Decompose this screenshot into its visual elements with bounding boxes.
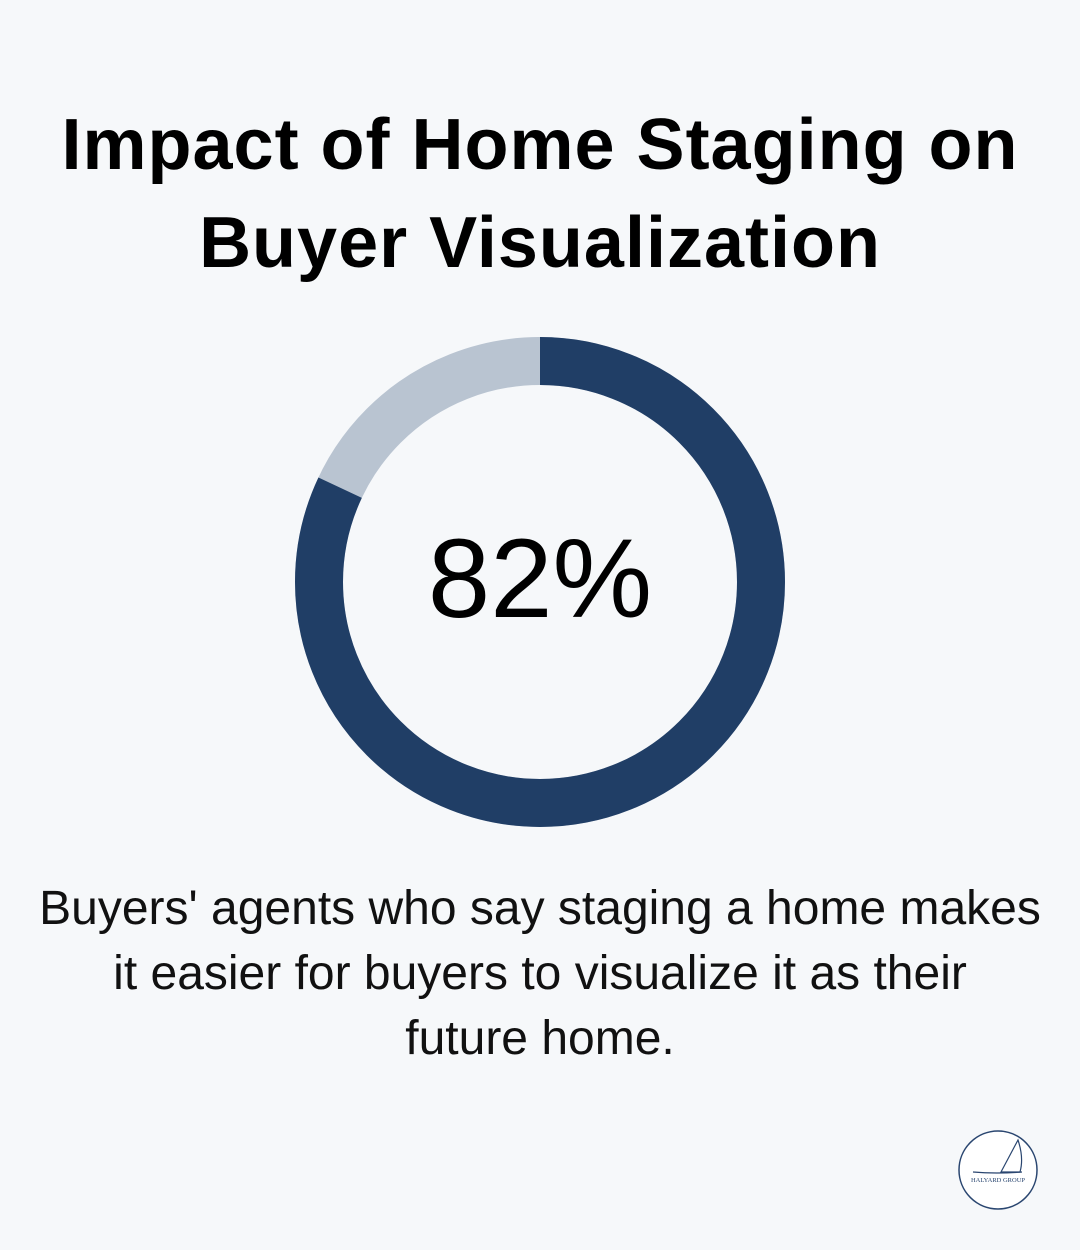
donut chart: 82%	[428, 516, 652, 641]
description text: it easier for buyers to visualize it as their	[113, 947, 967, 1000]
title: Buyer Visualization	[199, 203, 881, 283]
logo: Halyard Group: HALYARD GROUP	[971, 1177, 1025, 1184]
title: Impact of Home Staging on	[61, 105, 1019, 185]
description text	[39, 882, 1041, 1065]
description text: future home.	[405, 1012, 675, 1065]
title	[61, 105, 1019, 283]
description text: Buyers' agents who say staging a home makes	[39, 882, 1041, 935]
logo: Halyard Group	[958, 1130, 1038, 1210]
